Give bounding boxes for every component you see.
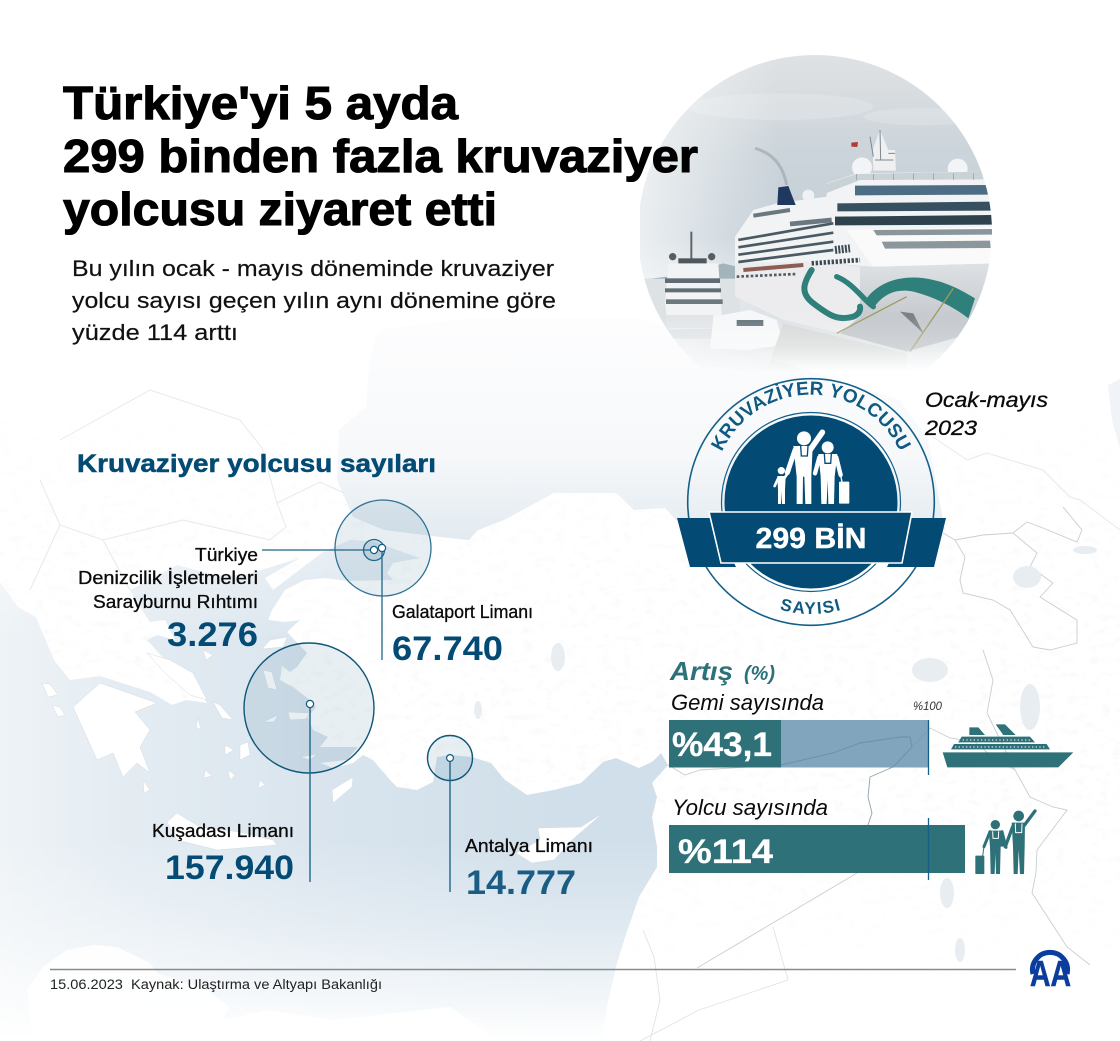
footer rule (50, 968, 1016, 970)
value: Sarayburnu: 3.276 (167, 616, 258, 654)
increase chart (669, 656, 1073, 880)
Cyprus (516, 813, 603, 863)
terrain texture (0, 380, 1120, 1000)
radar domes and mast (852, 158, 872, 174)
period label (924, 388, 1048, 440)
period label: 2023 (924, 416, 977, 440)
curved label: top: KRUVAZİYER YOLCUSU (710, 382, 912, 451)
ship hull (818, 262, 989, 352)
subtitle (72, 256, 556, 345)
label: 100 percent mark: %100 (913, 699, 942, 713)
distant hills (650, 263, 735, 279)
mark line: ships (928, 720, 930, 775)
title: 299 binden fazla kruvaziyer (63, 130, 698, 182)
yacht (665, 232, 723, 329)
smoke (755, 148, 787, 185)
Kusadasi marker (244, 643, 374, 882)
top deck railing (826, 172, 983, 193)
lakes (474, 546, 1097, 962)
bar: ships background (669, 720, 928, 768)
ribbon tails (677, 518, 946, 567)
label: Sarayburnu: Sarayburnu Rıhtımı (93, 592, 258, 612)
chart heading: (%) (744, 663, 775, 685)
label: Kusadasi: Kuşadası Limanı (152, 821, 294, 841)
badge: cruise passenger count (677, 378, 946, 626)
badge value: 299 BİN (756, 523, 866, 555)
Sarayburnu marker (262, 540, 384, 560)
period label: Ocak-mayıs (925, 388, 1048, 412)
Black Sea (337, 318, 945, 540)
badge outer ring (688, 379, 934, 625)
Peloponnese (73, 683, 157, 777)
country borders (640, 507, 1090, 1041)
section heading: Kruvaziyer yolcusu sayıları (77, 450, 436, 478)
value: Galataport: 67.740 (392, 630, 503, 668)
map markers and port labels (78, 500, 593, 902)
value: passengers: %114 (678, 833, 773, 871)
icon: passengers (975, 811, 1035, 874)
title: Türkiye'yi 5 ayda (63, 77, 458, 129)
chart heading: Artış (669, 656, 733, 686)
background map (0, 318, 1120, 1041)
quay (774, 324, 893, 352)
value: ships: %43,1 (672, 726, 772, 764)
value: Antalya: 14.777 (466, 864, 576, 902)
Mediterranean, Aegean and Marmara seas (0, 540, 668, 1041)
photo: cruise ship in circle (640, 55, 992, 364)
left fade (640, 78, 748, 348)
sky (640, 55, 982, 362)
label: Sarayburnu: Türkiye (195, 545, 258, 565)
label: ships: Gemi sayısında (671, 690, 824, 715)
ferry (710, 310, 783, 350)
subtitle: Bu yılın ocak - mayıs döneminde kruvaziyer (72, 256, 555, 281)
curved label: bottom: SAYISI (780, 598, 840, 614)
Istanbul magnifier circle (335, 500, 431, 596)
title (63, 77, 698, 235)
water (640, 279, 740, 339)
title: yolcusu ziyaret etti (63, 183, 497, 235)
Rhodes (332, 777, 353, 803)
ship superstructure (735, 172, 994, 267)
mark line: passengers (928, 818, 930, 880)
bar: ships value (669, 720, 781, 768)
deck stripes (737, 210, 860, 277)
Euboea (147, 653, 207, 700)
label: Galataport: Galataport Limanı (392, 602, 533, 622)
funnel (777, 186, 796, 205)
label: Antalya: Antalya Limanı (465, 836, 593, 856)
Galataport marker (378, 544, 386, 660)
label: passengers: Yolcu sayısında (672, 795, 828, 820)
subtitle: yüzde 114 arttı (72, 320, 238, 345)
islands (42, 637, 603, 863)
hull dragon artwork (804, 270, 873, 318)
label: Sarayburnu: Denizcilik İşletmeleri (78, 568, 258, 588)
bar: passengers (669, 825, 965, 873)
value: Kusadasi: 157.940 (165, 849, 294, 887)
icon: family of travellers (775, 431, 849, 504)
badge disc (724, 416, 898, 588)
footer source text: 15.06.2023 Kaynak: Ulaştırma ve Altyapı Bakanlığı (50, 977, 382, 992)
upper windows (855, 185, 991, 195)
ropes (837, 288, 953, 352)
chart heading (669, 656, 775, 686)
Caspian Sea (1108, 378, 1120, 455)
badge inner ring (722, 412, 900, 592)
label: Sarayburnu (78, 545, 258, 612)
ribbon centre (709, 512, 912, 563)
icon: AA logo: AA (1030, 953, 1071, 994)
Crete (167, 813, 277, 850)
icon: cruise ship (943, 724, 1073, 767)
Antalya marker (428, 736, 472, 892)
subtitle: yolcu sayısı geçen yılın aynı dönemine göre (72, 288, 556, 313)
Africa coast (0, 945, 500, 1041)
Aegean small islands (42, 637, 317, 793)
